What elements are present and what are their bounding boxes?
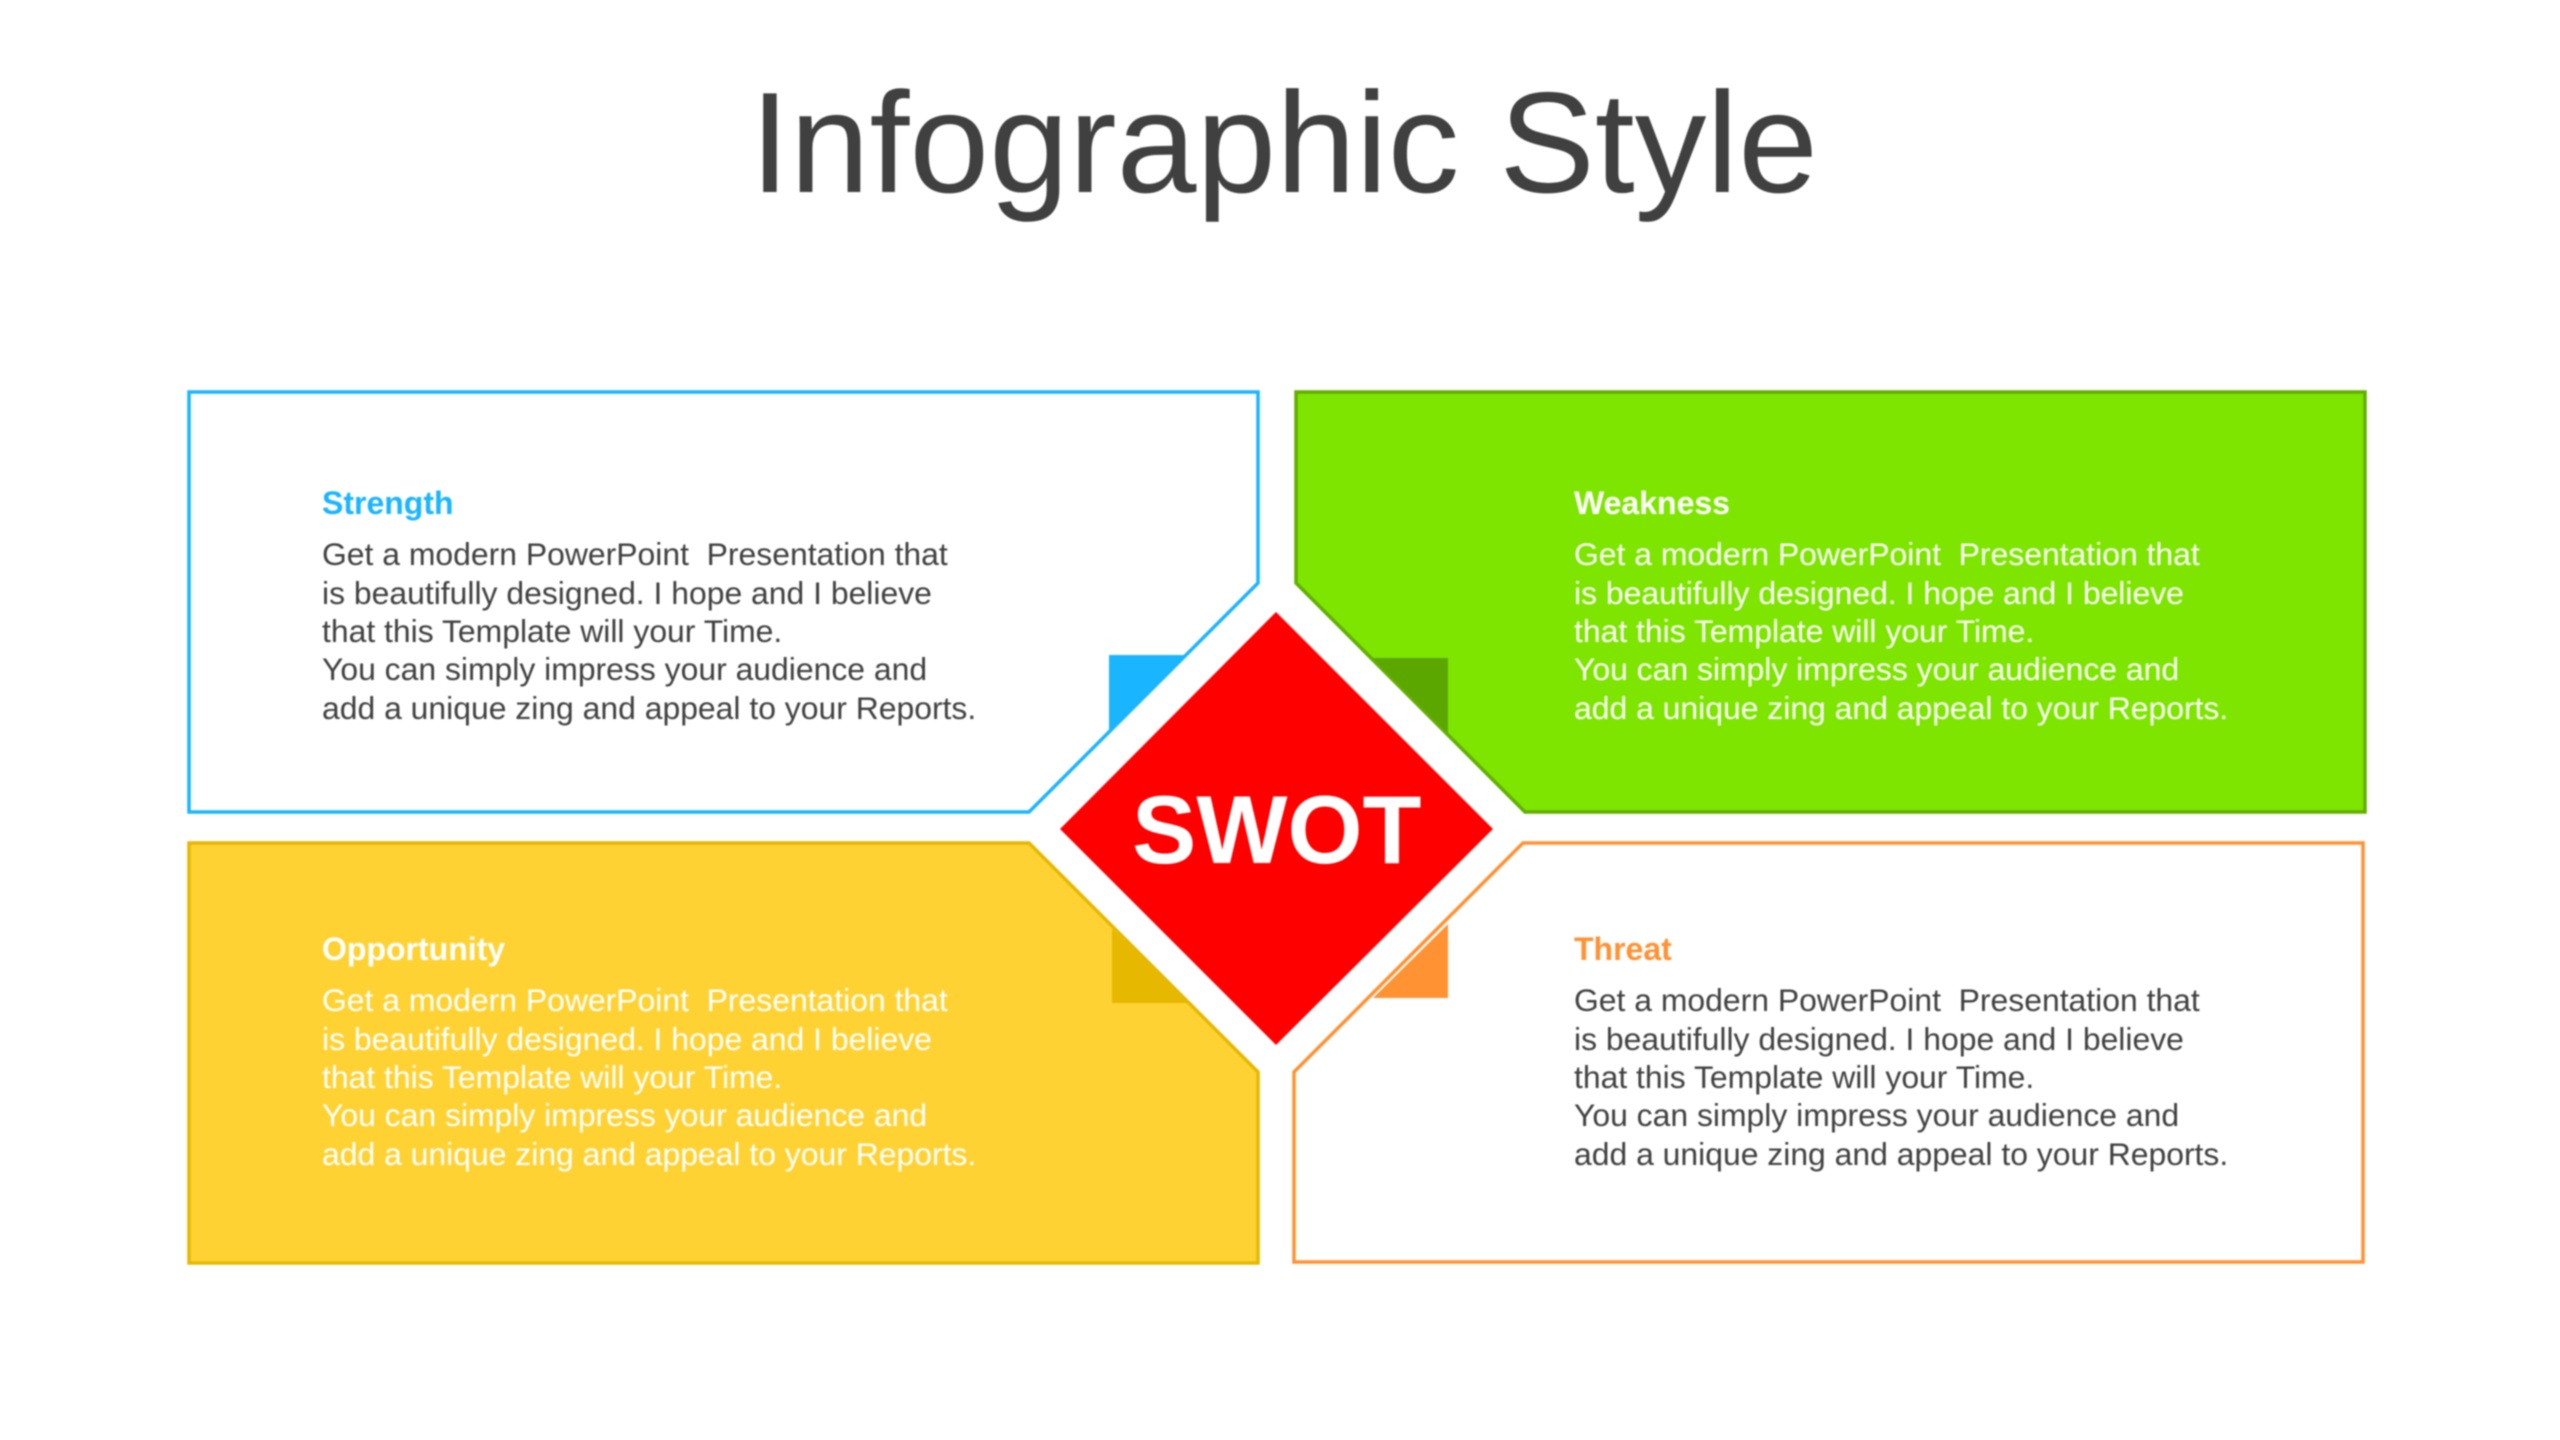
strength accent square <box>1109 655 1184 730</box>
opportunity heading: Opportunity <box>322 931 505 967</box>
threat body text: that this Template will your Time. <box>1574 1059 2034 1095</box>
weakness heading: Weakness <box>1574 485 1730 521</box>
panel: opportunity <box>189 843 1258 1263</box>
weakness body text: is beautifully designed. I hope and I believe <box>1574 575 2184 611</box>
strength body text: Get a modern PowerPoint Presentation that <box>322 536 948 572</box>
threat body text: add a unique zing and appeal to your Reports. <box>1574 1136 2228 1172</box>
threat heading: Threat <box>1574 931 1672 967</box>
strength heading: Strength <box>322 485 454 521</box>
opportunity body text: that this Template will your Time. <box>322 1059 782 1095</box>
weakness panel shape <box>1296 392 2365 812</box>
weakness body text: add a unique zing and appeal to your Reports. <box>1574 690 2228 726</box>
threat body text <box>1574 982 2228 1172</box>
title: Infographic Style <box>750 63 1818 223</box>
strength body text <box>322 536 976 726</box>
opportunity accent square <box>1112 929 1189 1003</box>
strength body text: is beautifully designed. I hope and I believe <box>322 575 932 611</box>
panel: strength <box>189 392 1258 812</box>
threat panel shape <box>1294 843 2363 1262</box>
weakness body text: Get a modern PowerPoint Presentation that <box>1574 536 2200 572</box>
red diamond <box>1060 612 1493 1045</box>
threat body text: is beautifully designed. I hope and I believe <box>1574 1021 2184 1057</box>
strength body text: that this Template will your Time. <box>322 613 782 649</box>
panel: threat <box>1294 843 2363 1262</box>
strength panel shape <box>189 392 1258 812</box>
center SWOT diamond <box>1060 612 1493 1045</box>
weakness body text: that this Template will your Time. <box>1574 613 2034 649</box>
threat accent square <box>1373 924 1448 998</box>
threat body text: Get a modern PowerPoint Presentation that <box>1574 982 2200 1018</box>
opportunity body text: Get a modern PowerPoint Presentation that <box>322 982 948 1018</box>
strength body text: You can simply impress your audience and <box>322 651 927 687</box>
SWOT label: SWOT <box>1132 777 1421 884</box>
panel: weakness <box>1296 392 2365 812</box>
weakness body text <box>1574 536 2228 726</box>
weakness body text: You can simply impress your audience and <box>1574 651 2179 687</box>
weakness accent square <box>1373 658 1448 733</box>
opportunity body text: You can simply impress your audience and <box>322 1097 927 1133</box>
opportunity panel shape <box>189 843 1258 1263</box>
opportunity body text <box>322 982 976 1172</box>
opportunity body text: is beautifully designed. I hope and I believe <box>322 1021 932 1057</box>
threat body text: You can simply impress your audience and <box>1574 1097 2179 1133</box>
strength body text: add a unique zing and appeal to your Reports. <box>322 690 976 726</box>
opportunity body text: add a unique zing and appeal to your Reports. <box>322 1136 976 1172</box>
